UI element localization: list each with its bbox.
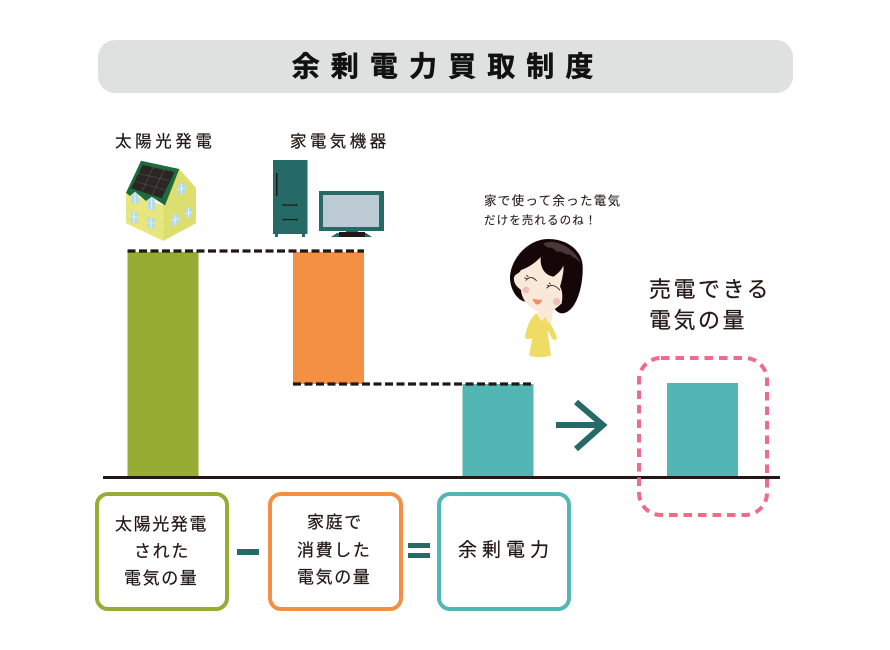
equals sign <box>408 543 430 558</box>
label: solar generation: 太陽光発電 <box>115 132 216 151</box>
box: generated electricity: 太陽光発電 <box>115 515 208 534</box>
dashed level line: generation <box>128 249 364 253</box>
box: consumed electricity: 家庭で <box>307 513 363 532</box>
bar: solar generation <box>128 252 198 476</box>
icon: refrigerator <box>273 160 308 237</box>
box: surplus electricity: 余剰電力 <box>458 539 554 561</box>
box: consumed electricity: 消費した <box>297 541 371 560</box>
speech text <box>484 190 621 228</box>
bar: sellable power <box>667 383 738 476</box>
title banner <box>98 40 793 93</box>
box: consumed electricity <box>270 494 401 609</box>
minus sign <box>237 549 259 555</box>
icon: television <box>319 191 384 237</box>
box: generated electricity: 電気の量 <box>124 569 198 588</box>
title banner: 余剰電力買取制度 <box>292 51 605 82</box>
icon: house with solar panels <box>126 161 196 241</box>
pink dashed highlight <box>639 358 767 515</box>
bar: surplus power <box>462 384 534 476</box>
bar: household consumption <box>293 252 364 384</box>
label: sellable electricity: 電気の量 <box>649 308 747 333</box>
label: home appliances: 家電気機器 <box>290 132 390 151</box>
box: consumed electricity: 電気の量 <box>297 568 371 587</box>
label: sellable electricity <box>649 277 771 333</box>
dashed level line: surplus <box>293 382 534 386</box>
speech text: だけを売れるのね！ <box>484 212 597 228</box>
label: sellable electricity: 売電できる <box>649 277 771 302</box>
box: surplus electricity <box>439 494 569 609</box>
speech text: 家で使って余った電気 <box>484 190 621 209</box>
box: generated electricity: された <box>134 542 190 561</box>
baseline <box>103 476 780 479</box>
box: generated electricity <box>97 494 227 609</box>
illustration: smiling woman <box>510 239 583 357</box>
arrow <box>556 402 603 449</box>
